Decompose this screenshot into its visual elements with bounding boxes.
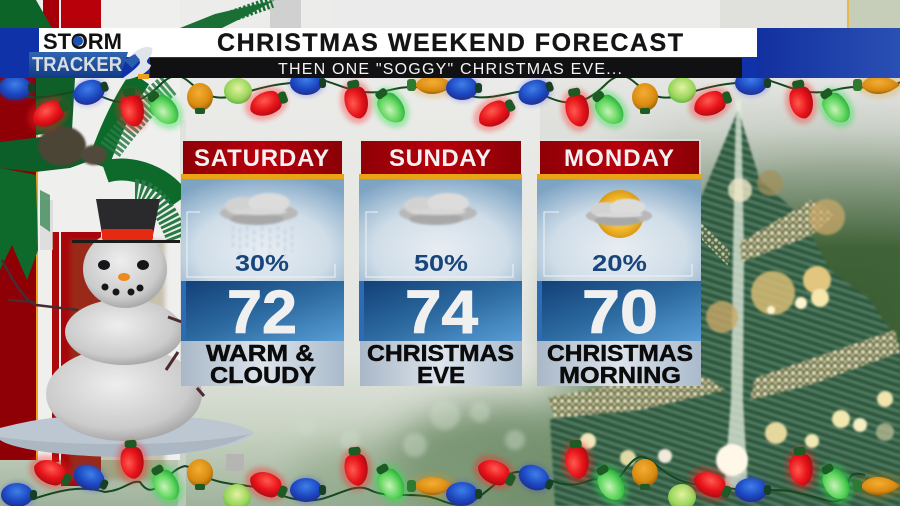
logo: storm tracker: TRACKER <box>32 54 123 76</box>
subtitle: THEN ONE "SOGGY" CHRISTMAS EVE... <box>278 61 622 78</box>
temperature: 70 <box>582 278 658 346</box>
title: CHRISTMAS WEEKEND FORECAST <box>217 29 683 57</box>
arms <box>2 260 78 310</box>
temperature <box>181 278 344 346</box>
description: CLOUDY <box>210 362 316 388</box>
day heading: SATURDAY <box>194 145 329 172</box>
temperature: 72 <box>227 278 297 346</box>
forecast card: sunday <box>359 139 522 388</box>
day heading: SUNDAY <box>389 145 491 172</box>
description <box>181 340 344 388</box>
logo: storm tracker <box>29 28 152 80</box>
description: MORNING <box>559 362 681 388</box>
header banner <box>0 28 900 78</box>
precipitation chance: 50% <box>414 250 468 276</box>
day heading: MONDAY <box>564 145 674 172</box>
body <box>46 347 202 441</box>
precipitation chance: 30% <box>235 250 289 276</box>
face <box>98 260 110 270</box>
snow base <box>0 417 254 457</box>
icon: cloud <box>399 193 477 225</box>
temperature <box>359 278 522 346</box>
icon: rain cloud <box>220 193 298 258</box>
description <box>537 340 701 388</box>
description: CHRISTMAS <box>367 340 514 366</box>
precipitation chance: 20% <box>592 250 647 276</box>
bokeh lights <box>580 170 894 476</box>
sky panel <box>537 179 701 281</box>
day heading <box>537 141 701 179</box>
palm fronds <box>0 0 275 280</box>
forecast card: monday <box>537 139 701 388</box>
blurred ground bokeh <box>295 400 525 457</box>
icon: sun behind cloud <box>586 190 652 238</box>
description: CHRISTMAS <box>547 340 693 366</box>
description: WARM & <box>206 340 314 366</box>
day heading <box>359 141 522 179</box>
temperature: 74 <box>405 278 478 346</box>
description <box>360 340 522 388</box>
temperature <box>537 278 701 346</box>
snowman <box>0 199 254 457</box>
sky panel <box>181 179 344 281</box>
bottom light garland <box>0 439 900 506</box>
description: EVE <box>417 362 465 388</box>
forecast card: saturday <box>181 139 344 388</box>
christmas tree <box>295 100 900 506</box>
top light garland <box>0 69 900 138</box>
day heading <box>181 141 344 179</box>
logo: storm tracker: STORM <box>43 29 122 54</box>
left red panels <box>0 0 180 486</box>
sky panel <box>359 179 522 281</box>
hat <box>96 199 160 240</box>
